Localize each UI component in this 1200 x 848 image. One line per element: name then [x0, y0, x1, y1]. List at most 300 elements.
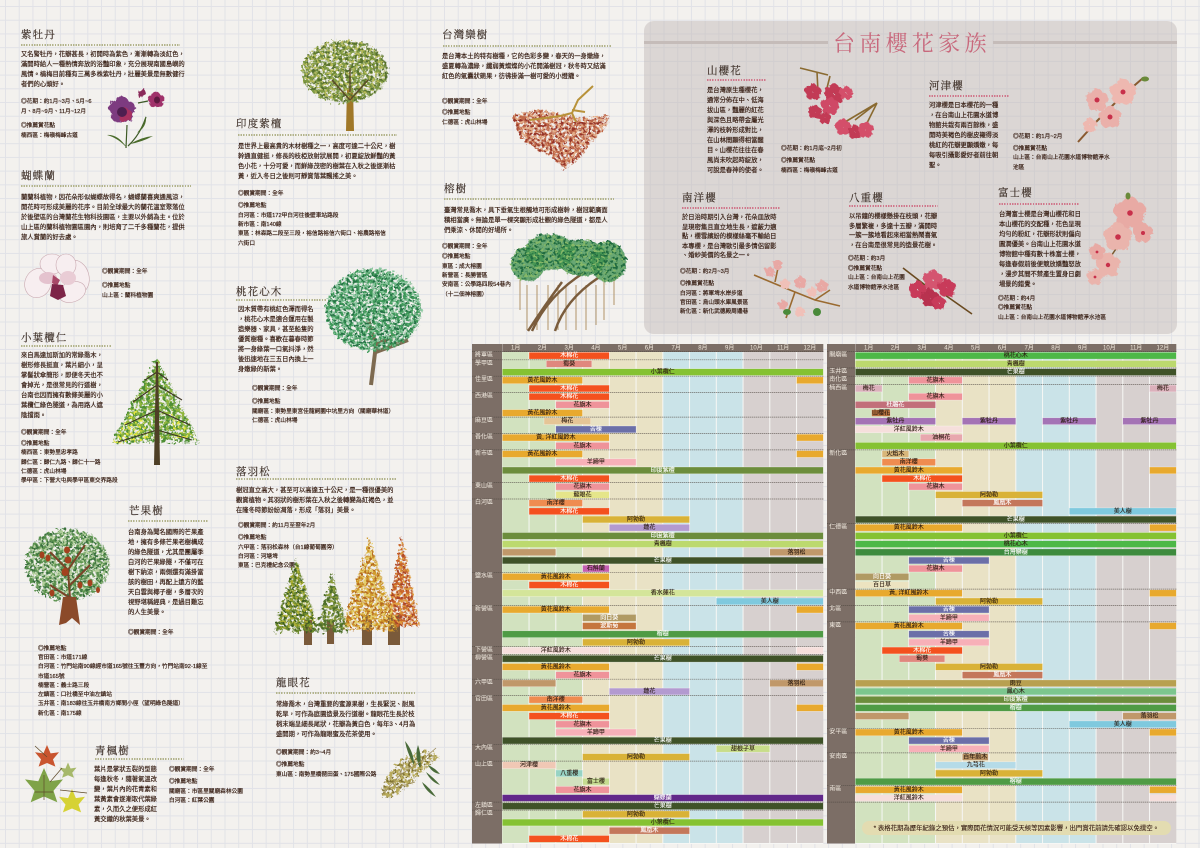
- text: 山櫻花 description: 澤的枝幹形成對比，: [707, 127, 764, 134]
- text: 落羽松 description: 觀賞植物。其羽狀的樹形葉在入秋之後轉變為紅褐色，並: [236, 497, 393, 504]
- icon: 八重櫻 blossom: [902, 265, 974, 317]
- district: 東區: 落羽松: [1141, 712, 1159, 720]
- icon: 青楓樹 leaves: [25, 745, 87, 812]
- district: 柳營區: 黃花風鈴木: [541, 662, 571, 670]
- text: 桃花心木 description: 優質樹種。喜歡在暮春時節: [238, 336, 314, 343]
- text: 台灣欒樹 description: 是台灣本土的特有樹種，它的色彩多變，春天的一身嫩綠，: [442, 53, 606, 60]
- text: 蝴蝶蘭 description: 於後壁區的台灣蘭花生物科技園區，主要以外銷為主。位於: [21, 214, 185, 221]
- text: 桃花心木 spots: [252, 398, 394, 424]
- text: 南洋櫻 description: 於日治時期引入台灣，花朵皿放時: [682, 214, 776, 221]
- text: 青楓樹 description: 葉黃素會逐漸取代葉綠: [94, 796, 157, 803]
- text: 富士櫻 description: 均勻的粉紅，花瓣形狀則偏向: [999, 231, 1081, 238]
- text: 芒果樹 description: 天白雲與椰子樹，多層次的: [128, 589, 204, 596]
- text: 小葉欖仁 description: [21, 351, 103, 419]
- text: 印度紫檀 spots: 新市區：南140線: [238, 222, 282, 228]
- icon: 河津櫻 blossom: [1076, 72, 1151, 145]
- district: 仁德區: 仁德區: [829, 523, 847, 531]
- district: 官田區: 南洋櫻: [547, 695, 565, 703]
- text: 榕樹 spots: 新營區：長勝營區: [442, 273, 488, 279]
- district: 學甲區: [472, 359, 823, 376]
- text: 落羽松 description: 樹冠直立高大，甚至可以高達五十公尺，是一種很優美的: [236, 487, 393, 494]
- district: 山上區: 富士櫻: [587, 777, 605, 785]
- district: 仁德區: 花旗木: [927, 564, 945, 572]
- district: 歸仁區: 鳳凰木: [640, 826, 658, 834]
- text: 南洋櫻 spots: ◎推薦賞花點: [680, 281, 714, 287]
- text: 山櫻花 description: 與深色且略帶金屬光: [707, 117, 764, 124]
- text: 山櫻花 description: 風尚未吹起時綻放，: [707, 157, 764, 164]
- district: 西港區: 西港區: [475, 392, 493, 400]
- text: 河津櫻 description: 聖。: [929, 162, 942, 169]
- district: 東山區: [472, 482, 823, 498]
- text: 河津櫻 spots: [1013, 145, 1110, 173]
- district: 新營區: 向日葵: [600, 613, 618, 621]
- text: 紫牡丹 viewing spot: 楠西區：梅嶺梅峰古道: [21, 133, 78, 139]
- district: 楠西區: 紫牡丹: [980, 417, 998, 425]
- text: 山櫻花 spots: ◎推薦賞花點: [781, 158, 815, 164]
- text: 榕樹 spots: （十二佃神榕園）: [442, 292, 488, 298]
- district: 新營區: 新營區: [475, 605, 493, 613]
- district: 善化區: 善化區: [475, 432, 493, 440]
- district: 安平區: 安平區: [829, 727, 847, 735]
- icon: 龍眼花 branch: [380, 741, 440, 799]
- text: 富士櫻 description: 台灣富士櫻是台灣山櫻花和日: [999, 211, 1081, 218]
- text: 龍眼花 description: [276, 700, 415, 738]
- district: 安平區: 羊蹄甲: [940, 744, 958, 752]
- text: 富士櫻 description: 每逢春假前後便競放嬌豔怒放: [999, 261, 1081, 268]
- text: 台灣欒樹 viewing period: ◎觀賞期間：全年: [442, 99, 488, 105]
- district: 東山區: 東山區: [475, 482, 493, 490]
- text: 榕樹 description: 積相當廣。無論是單一棵突顯形成壯觀的綠色隧道，都是人: [444, 217, 608, 224]
- month header: 4月: [591, 344, 601, 351]
- text: 台灣欒樹 spots: ◎推薦地點: [442, 110, 470, 116]
- district: 白河區: 阿勃勒: [627, 515, 645, 523]
- text: 山櫻花 description: [707, 86, 764, 176]
- text: 台灣欒樹 description: 盛夏轉為濃綠，纖弱黃燦燦的小花開滿樹冠，秋冬時又結滿: [442, 63, 606, 70]
- district: 山上區: 八重櫻: [560, 769, 578, 777]
- text: 落羽松 spots: ◎推薦地點: [238, 535, 266, 541]
- district: 新化區: 花旗木: [927, 482, 945, 490]
- heading: 落羽松: 落羽松: [236, 466, 271, 478]
- district: 學甲區: 小葉欖仁: [651, 368, 675, 376]
- panel: 台灣欒樹: [442, 29, 611, 171]
- text: 河津櫻 flowering period: ◎花期：約1月~2月: [1013, 134, 1062, 140]
- district: 學甲區: 蜀葵: [563, 359, 575, 367]
- text: 富士櫻 description: 圓潤優美。台南山上花園水道: [999, 241, 1081, 248]
- district: 楠西區: 楠西區: [829, 383, 847, 391]
- text: 桃花心木 spots: 仁德區：虎山林場: [252, 418, 298, 424]
- district: 關廟區: 關廟區: [829, 351, 847, 359]
- month header: 6月: [645, 344, 654, 351]
- district: 山上區: 山上區: [475, 760, 493, 768]
- text: 小葉欖仁 description: 台南也因而擁有數條美麗的小: [21, 392, 103, 399]
- text: 龍眼花 description: 常綠喬木，台灣重要的蜜源果樹，生長緊況、耐風: [276, 701, 415, 708]
- district: 新營區: 黃花風鈴木: [541, 605, 571, 613]
- district: 新化區: 新化區: [829, 449, 847, 457]
- text: 芒果樹 description: 地，擁有多條芒果老樹構成: [128, 539, 204, 546]
- district: 山上區: 花旗木: [574, 785, 592, 793]
- district: 仁德區: 小葉欖仁: [1004, 531, 1028, 539]
- district: 仁德區: 百日草: [873, 580, 891, 588]
- panel: 印度紫檀: [236, 38, 397, 247]
- district: 麻豆區: [472, 416, 823, 433]
- district: 白河區: [472, 498, 823, 572]
- text: 山櫻花 description: 拔山區，豔麗的紅花: [707, 107, 764, 114]
- icon: 桃花心木 tree: [324, 267, 424, 386]
- text: 芒果樹 description: 白河的芒果綠隧，不僅可在: [128, 559, 204, 566]
- month header: 11月: [777, 344, 789, 351]
- district: 關廟區: 青楓樹: [1007, 359, 1025, 367]
- text: 芒果樹 spots: 市道165號: [38, 674, 65, 680]
- text: 蝴蝶蘭 spot: ◎推薦地點: [102, 283, 130, 289]
- district: 西港區: 黃花風鈴木: [527, 408, 557, 416]
- month header: 2月: [891, 344, 900, 351]
- text: 蝴蝶蘭 description: 旅人賞蘭的好去處。: [21, 234, 78, 241]
- text: 印度紫檀 spots: [238, 202, 386, 247]
- text: 南洋櫻 description: 本專櫻，是台灣歐引最多情侶留影: [682, 243, 776, 250]
- text: 龍眼花 spots: [276, 760, 376, 778]
- month header: 3月: [918, 344, 927, 351]
- text: 紫牡丹 viewing spot: [21, 122, 78, 139]
- icon: 富士櫻 blossom: [1085, 190, 1157, 288]
- text: 桃花心木 viewing period: ◎觀賞期間：全年: [252, 386, 298, 392]
- district: 楠西區: [827, 383, 1176, 449]
- text: 芒果樹 description: [128, 528, 204, 616]
- icon: 紫牡丹 flower: [107, 88, 164, 148]
- district: 官田區: 羊蹄甲: [587, 728, 605, 736]
- month header: 5月: [971, 344, 980, 351]
- district: 新營區: 阿勃勒: [627, 638, 645, 646]
- district: 東山區: 花旗木: [574, 482, 592, 490]
- district: 東區: 雨豆: [1010, 680, 1022, 687]
- text: 桃花心木 spots: ◎推薦地點: [252, 399, 280, 405]
- text: 小葉欖仁 spots: ◎推薦地點: [21, 441, 49, 447]
- text: 小葉欖仁 description: 掌髻狀傘簡形，即便冬天也不: [21, 372, 103, 379]
- district: 鹽水區: 黃花風鈴木: [541, 572, 571, 580]
- text: 落羽松 viewing period: ◎觀賞期間：約11月至翌年2月: [238, 523, 315, 529]
- text: 紫牡丹 description: 者們的心頭好。: [21, 81, 65, 88]
- district: 楠西區: 油桐花: [932, 433, 950, 441]
- district: 楠西區: 洋紅風鈴木: [894, 425, 924, 433]
- callout: table note: * 表格花期為歷年紀錄之預估，實際開花情況可能受天候等因素影響，出門賞花前請先確認以免撲空。: [874, 823, 1159, 832]
- district: 官田區: [472, 695, 823, 744]
- district: 楠西區: 紫牡丹: [1141, 417, 1159, 425]
- text: 青楓樹 description: [94, 765, 157, 823]
- text: 青楓樹 spots: 關廟區：市區里關廟森林公園: [169, 789, 243, 795]
- panel: 桃花心木: [236, 267, 424, 424]
- icon: 小葉欖仁 tree: [112, 358, 200, 465]
- district: 麻豆區: 梅花: [561, 417, 573, 425]
- district: 下營區: 洋紅風鈴木: [541, 646, 571, 654]
- district: 歸仁區: [472, 809, 823, 842]
- text: 台灣欒樹 description: 紅色的氣囊狀蒴果，彷彿掛滿一樹可愛的小燈籠。: [442, 73, 581, 80]
- text: 落羽松 spots: 六甲區：落羽松森林（台1線葡萄園旁）: [238, 545, 338, 551]
- district: 安南區: 阿勃勒: [980, 769, 998, 777]
- district: 學甲區: 學甲區: [475, 359, 493, 367]
- district: 中西區: [827, 588, 1176, 605]
- text: 河津櫻 description: ，在台南山上花園水道博: [929, 112, 998, 119]
- text: 落羽松 description: 在隆冬時節紛紛凋落，形成「落羽」美景。: [236, 507, 356, 514]
- text: 河津櫻 description: 河津櫻是日本櫻花的一種: [929, 102, 998, 109]
- icon: 台灣欒樹 fruit branch: [512, 85, 612, 170]
- text: 芒果樹 spots: 左鎮區：口社橋至中油左鎮站: [38, 692, 112, 698]
- text: 蝴蝶蘭 viewing period: ◎觀賞期間：全年: [102, 269, 148, 275]
- text: 小葉欖仁 spots: 歸仁區：歸仁九路、歸仁十一路: [21, 460, 101, 466]
- text: 桃花心木 description: 後迅速地在三五日內換上一: [238, 356, 314, 363]
- text: 落羽松 spots: 白河區：河塘埤: [238, 554, 278, 560]
- text: 富士櫻 spots: ◎推薦賞花點: [998, 305, 1032, 311]
- district: 柳營區: [472, 654, 823, 679]
- district: 麻豆區: 麻豆區: [475, 416, 493, 424]
- district: 新化區: 阿勃勒: [980, 490, 998, 498]
- text: 桃花心木 description: 因木質帶有桃紅色澤而得名: [238, 306, 314, 313]
- month header: [864, 344, 1169, 351]
- district: 東區: 東區: [829, 621, 841, 629]
- text: 山櫻花 description: 可說是春神的使者。: [707, 167, 764, 174]
- district: 白河區: 白河區: [475, 498, 493, 506]
- icon: 落羽松 trees: [273, 536, 421, 645]
- heading: 青楓樹: 青楓樹: [95, 746, 130, 756]
- district: 白河區: 石斛蘭: [587, 564, 605, 572]
- district: 楠西區: 紫牡丹: [886, 417, 904, 425]
- text: 印度紫檀 description: 色小花，十分可愛，而鮮綠茂密的樹葉在入秋之後逐漸枯: [238, 163, 395, 170]
- text: 紫牡丹 description: 風情。楠梅目前種有三萬多株紫牡丹，壯麗美景是無數健行: [21, 71, 185, 78]
- district: 大內區: 甜根子草: [731, 744, 755, 752]
- month header: 10月: [1103, 344, 1116, 351]
- text: 小葉欖仁 spots: 仁德區：虎山林場: [21, 469, 66, 475]
- district: 下營區: 下營區: [475, 645, 493, 653]
- text: 小葉欖仁 description: 葉欖仁綠色隧道，為用路人遮: [21, 402, 103, 409]
- month header: 9月: [725, 344, 734, 351]
- district: 六甲區: 落羽松: [788, 679, 806, 687]
- district: 中西區: 黃, 洋紅風鈴木: [889, 589, 928, 597]
- district: 白河區: 蓮花: [643, 523, 655, 531]
- district: 西港區: 木棉花: [560, 392, 578, 400]
- heading: 八重櫻: 八重櫻: [849, 193, 884, 204]
- district: 六甲區: 六甲區: [475, 678, 493, 686]
- text: 富士櫻 description: ，漫步其間不禁產生置身日劇: [999, 271, 1081, 278]
- month header: 10月: [750, 344, 763, 351]
- district: 柳營區: 柳營區: [475, 654, 493, 662]
- district: 新營區: 波斯菊: [600, 622, 618, 630]
- district: 佳里區: 木棉花: [560, 384, 578, 392]
- district: 大內區: [472, 744, 823, 760]
- text: 南洋櫻 spots: [680, 280, 748, 318]
- district: 楠西區: 梅花: [863, 384, 875, 392]
- chart: left bloom calendar: [470, 342, 825, 845]
- text: 蝴蝶蘭 spot: 山上區：蘭科植物園: [102, 293, 153, 299]
- text: 芒果樹 description: 的人生美景。: [128, 609, 166, 616]
- heading: 南洋櫻: 南洋櫻: [682, 193, 717, 204]
- district: 歸仁區: 小葉欖仁: [651, 818, 675, 826]
- district: 新市區: 黃花風鈴木: [527, 450, 557, 458]
- district: 新市區: [472, 449, 823, 482]
- district: 楠西區: 花旗木: [927, 392, 945, 400]
- district: 佳里區: 黃花風鈴木: [527, 376, 557, 384]
- callout: table note: [862, 821, 1171, 835]
- district: 新營區: 榕樹: [657, 630, 669, 638]
- text: 榕樹 description: [444, 206, 608, 236]
- text: 青楓樹 description: 每逢秋冬，隨著氣溫改: [94, 776, 157, 783]
- text: 河津櫻 description: 開時美褐色的樹皮襯得淡: [929, 132, 998, 139]
- text: 河津櫻 description: 桃紅的花瓣更顯嬌嫩，每: [929, 142, 998, 149]
- district: 仁德區: 黃花風鈴木: [894, 523, 924, 531]
- text: 榕樹 spots: 安南區：公學路四段54巷內: [442, 282, 511, 288]
- icon: 南洋櫻 branch: [752, 260, 844, 325]
- heading: 富士櫻: 富士櫻: [998, 188, 1033, 199]
- district: 新市區: 印度紫檀: [651, 466, 675, 474]
- district: 關廟區: 桃花心木: [1004, 351, 1028, 359]
- text: 紫牡丹 description: 滿開時給人一種熱情奔放的浴豔印象，充分展現南國島嶼的: [21, 61, 185, 68]
- panel: 榕樹: [441, 180, 631, 332]
- text: 芒果樹 spots: 白河區：竹門站南90線經市道165號往玉豐方向，竹門站南92-1線至: [38, 664, 207, 670]
- text: 小葉欖仁 spots: 楠西區：東勢里忠孝路: [21, 450, 78, 456]
- text: 山櫻花 description: 目。山櫻花往往在春: [707, 147, 764, 154]
- panel: 河津櫻: [928, 72, 1153, 170]
- district: 柳營區: 芒果樹: [654, 654, 672, 662]
- district: 北區: 羊蹄甲: [940, 613, 958, 621]
- text: 小葉欖仁 description: 陰擋雨。: [21, 412, 46, 419]
- district: 東區: 苦楝: [943, 630, 955, 638]
- district: 將軍區: [472, 351, 823, 359]
- month header: 3月: [565, 344, 574, 351]
- text: 印度紫檀 spots: ◎推薦地點: [238, 203, 266, 209]
- district: 東區: 蜀葵: [916, 654, 928, 662]
- district: 西港區: 花旗木: [574, 400, 592, 408]
- icon: 山櫻花 blossom: [800, 66, 880, 141]
- heading: 台南櫻花家族: 台南櫻花家族: [833, 31, 991, 56]
- district: 左鎮區: [472, 801, 823, 810]
- district: 鹽水區: 美人樹: [761, 597, 779, 605]
- district: 北區: [827, 604, 1176, 621]
- text: 落羽松 spots: 東區：巴克禮紀念公園: [238, 563, 295, 569]
- icon: 榕樹 tree: [510, 232, 630, 332]
- district: 東區: 黃花風鈴木: [894, 622, 924, 630]
- month header: 7月: [1025, 344, 1034, 351]
- district: 新市區: 新市區: [475, 449, 493, 457]
- district: 六甲區: 蓮花: [643, 687, 655, 695]
- text: 芒果樹 description: 樹下納涼，兩側還有滿掛當: [128, 569, 204, 576]
- district: 歸仁區: 木棉花: [560, 834, 578, 842]
- text: 南洋櫻 description: 點，櫻雪繽紛的模樣絲毫不輸給日: [682, 233, 776, 240]
- text: 蝴蝶蘭 spot: [102, 282, 153, 299]
- heading: 台灣欒樹: 台灣欒樹: [442, 30, 488, 41]
- text: 富士櫻 spots: [998, 304, 1106, 323]
- district: 新化區: 木棉花: [913, 474, 931, 482]
- district: 安南區: 榕樹: [1010, 777, 1022, 785]
- district: 仁德區: 桃花心木: [1004, 540, 1028, 548]
- district: 大內區: 大內區: [475, 744, 493, 752]
- text: 南洋櫻 spots: 新化區：新化武德殿周邊巷: [680, 309, 748, 315]
- district: 新化區: 鳳凰木: [993, 499, 1011, 507]
- icon: 芒果樹 tree: [24, 528, 110, 625]
- text: 青楓樹 description: 素，久而久之便形成紅: [94, 806, 157, 813]
- text: 桃花心木 spots: 關廟區：東勢里東宮佳龍飼園中坑里方向（關廟華林道）: [252, 409, 394, 415]
- district: 柳營區: 花旗木: [574, 671, 592, 679]
- district: 善化區: 花旗木: [574, 441, 592, 449]
- panel: 蝴蝶蘭: [21, 170, 191, 303]
- heading: 小葉欖仁: 小葉欖仁: [21, 332, 67, 344]
- district: 東區: 阿勃勒: [980, 662, 998, 670]
- district: 安南區: 安南區: [829, 752, 847, 760]
- month header: 2月: [538, 344, 547, 351]
- text: 八重櫻 flowering period: ◎花期：約3月: [848, 256, 885, 262]
- heading: 龍眼花: 龍眼花: [276, 678, 311, 688]
- text: 南洋櫻 flowering period: ◎花期：約2月~3月: [680, 269, 729, 275]
- district: 歸仁區: 歸仁區: [475, 809, 493, 817]
- district: 中西區: 阿勃勒: [980, 597, 998, 605]
- text: 青楓樹 description: 葉片是掌狀五裂的型態: [94, 766, 157, 773]
- district: 官田區: 花旗木: [574, 720, 592, 728]
- text: 芒果樹 description: 台南身為聞名國際的芒果產: [128, 529, 204, 536]
- district: 白河區: 青楓樹: [654, 540, 672, 548]
- district: 大內區: 阿勃勒: [627, 752, 645, 760]
- text: 富士櫻 spots: 山上區：台南山上花園水道博物館淨水池區: [998, 315, 1106, 321]
- district: 南區: [827, 785, 1176, 802]
- text: 榕樹 spots: ◎推薦地點: [442, 254, 470, 260]
- text: 小葉欖仁 spots: 學甲區：下營大屯與學甲區東交界路段: [21, 478, 118, 484]
- district: 楠西區: 紫牡丹: [1060, 417, 1078, 425]
- district: 官田區: 芒果樹: [654, 736, 672, 744]
- text: 紫牡丹 flowering period: [21, 98, 92, 115]
- text: 龍眼花 description: 盛開期，可作為龍眼蜜及花茶使用。: [276, 731, 377, 738]
- text: 八重櫻 spots: 水道博物館淨水池區: [848, 285, 899, 291]
- text: 小葉欖仁 viewing period: ◎觀賞期間：全年: [21, 430, 66, 436]
- text: 富士櫻 description: 博物館中種有數十株富士櫻，: [999, 251, 1081, 258]
- month header: 6月: [998, 344, 1007, 351]
- text: 印度紫檀 spots: 白河區：市道172甲白河往後壁車站路段: [238, 213, 338, 219]
- text: 山櫻花 flowering period: ◎花期：約1月底~2月初: [781, 146, 842, 152]
- text: 龍眼花 spots: 東山區：南勢里橋琵田蛋、175國際公路: [276, 772, 376, 778]
- month header: 8月: [698, 344, 708, 351]
- text: 芒果樹 spots: [38, 644, 208, 717]
- text: 河津櫻 description: [929, 101, 998, 171]
- district: 南化區: [827, 375, 1176, 384]
- district: 楠西區: 杜鵑花: [886, 400, 904, 408]
- text: 芒果樹 description: 視野堪稱經典，是過目難忘: [128, 599, 204, 606]
- panel: 落羽松: [236, 466, 421, 645]
- district: 新化區: 南洋櫻: [900, 458, 918, 466]
- district: 左鎮區: 左鎮區: [475, 801, 493, 809]
- district: 東區: 羊蹄甲: [940, 638, 958, 646]
- text: 台灣欒樹 description: [442, 52, 606, 80]
- text: 八重櫻 description: ，在台南是很常見的造景花樹。: [849, 242, 937, 249]
- district: 新化區: 美人樹: [1114, 507, 1132, 515]
- text: 富士櫻 description: 場景的錯覺。: [999, 281, 1037, 288]
- text: 山櫻花 description: 通常分佈在中、低海: [707, 97, 764, 104]
- district: 新化區: 黃花風鈴木: [894, 466, 924, 474]
- text: 蝴蝶蘭 description: 山上區的蘭科植物園區園內，則培育了二千多種蘭花，提供: [21, 224, 185, 231]
- text: 台灣欒樹 spots: 仁德區：虎山林場: [442, 120, 488, 126]
- district: 安平區: [827, 727, 1176, 752]
- district: 官田區: 木棉花: [560, 712, 578, 720]
- panel: 山櫻花: [706, 62, 881, 174]
- text: 河津櫻 spots: 山上區：台南山上花園水道博物館淨水: [1013, 155, 1110, 161]
- text: 河津櫻 spots: 池區: [1013, 165, 1024, 171]
- panel: 紫牡丹: [21, 29, 185, 148]
- district: 將軍區: 木棉花: [560, 351, 578, 359]
- district: 南區: 黃花風鈴木: [894, 785, 924, 793]
- district: 山上區: [472, 760, 823, 802]
- month header: 7月: [672, 344, 681, 351]
- district: 鹽水區: [472, 572, 823, 605]
- month header: 5月: [618, 344, 627, 351]
- chart: right bloom calendar: [825, 342, 1180, 845]
- month header: 12月: [804, 344, 816, 351]
- icon: 蝴蝶蘭 flower: [24, 254, 90, 303]
- text: 芒果樹 spots: 玉井區：南183線往玉井橋南方鄉間小徑（望明綠色隧道）: [38, 701, 184, 707]
- district: 西港區: [472, 392, 823, 416]
- district: 安南區: 九芎花: [967, 761, 985, 769]
